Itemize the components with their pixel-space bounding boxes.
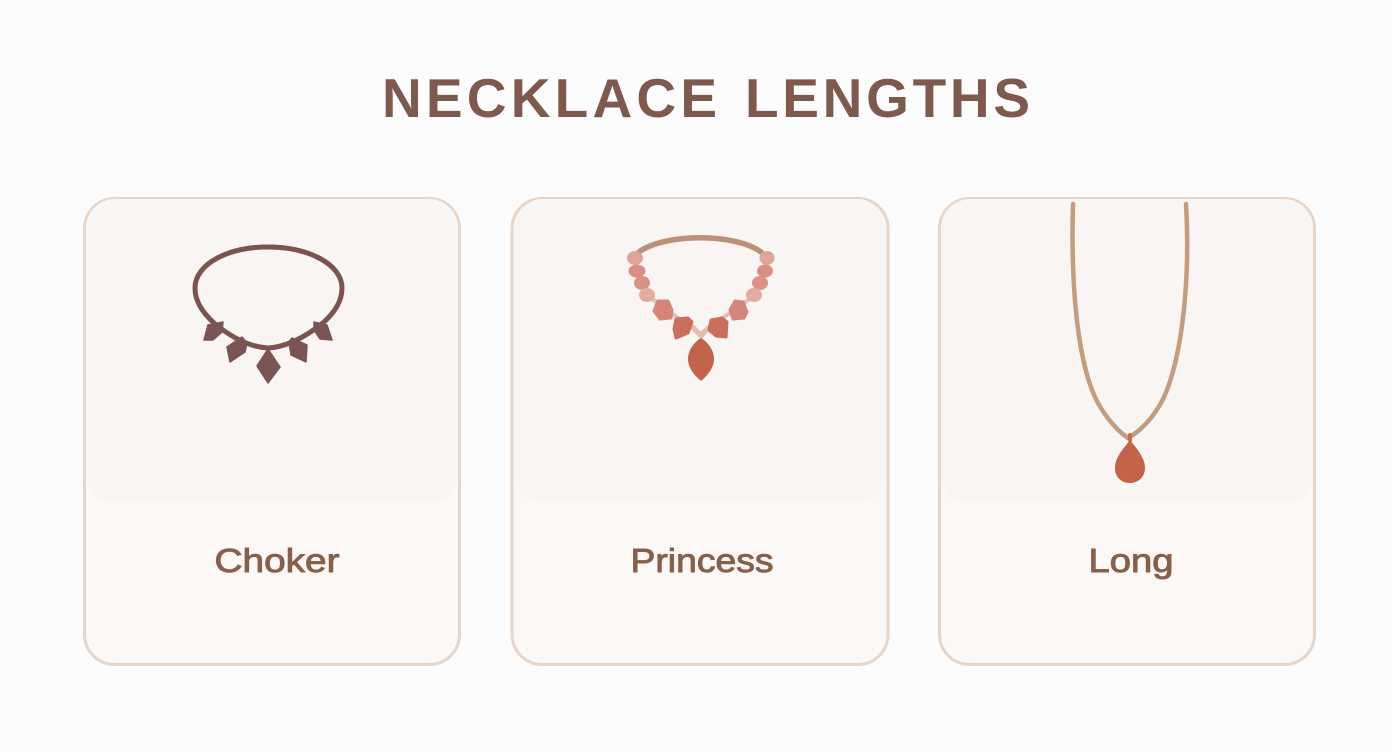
card background: [512, 198, 888, 664]
panel: choker: [84, 198, 460, 664]
panel: princess: [512, 198, 888, 664]
illustration area: [941, 199, 1313, 502]
icon: long necklace: [1073, 204, 1187, 483]
label: Long: Long: [1088, 542, 1174, 579]
label: Princess: Princess: [630, 542, 774, 579]
title: LENGTHS: [745, 67, 1030, 129]
title: NECKLACE: [382, 67, 717, 129]
illustration area: [86, 199, 458, 502]
panel: long: [940, 198, 1314, 664]
label: Choker: Choker: [214, 542, 340, 579]
card background: [940, 198, 1314, 664]
icon: princess necklace: [627, 238, 774, 381]
title: [382, 67, 1030, 129]
icon: choker necklace: [195, 247, 342, 383]
card background: [84, 198, 460, 664]
illustration area: [514, 199, 886, 502]
